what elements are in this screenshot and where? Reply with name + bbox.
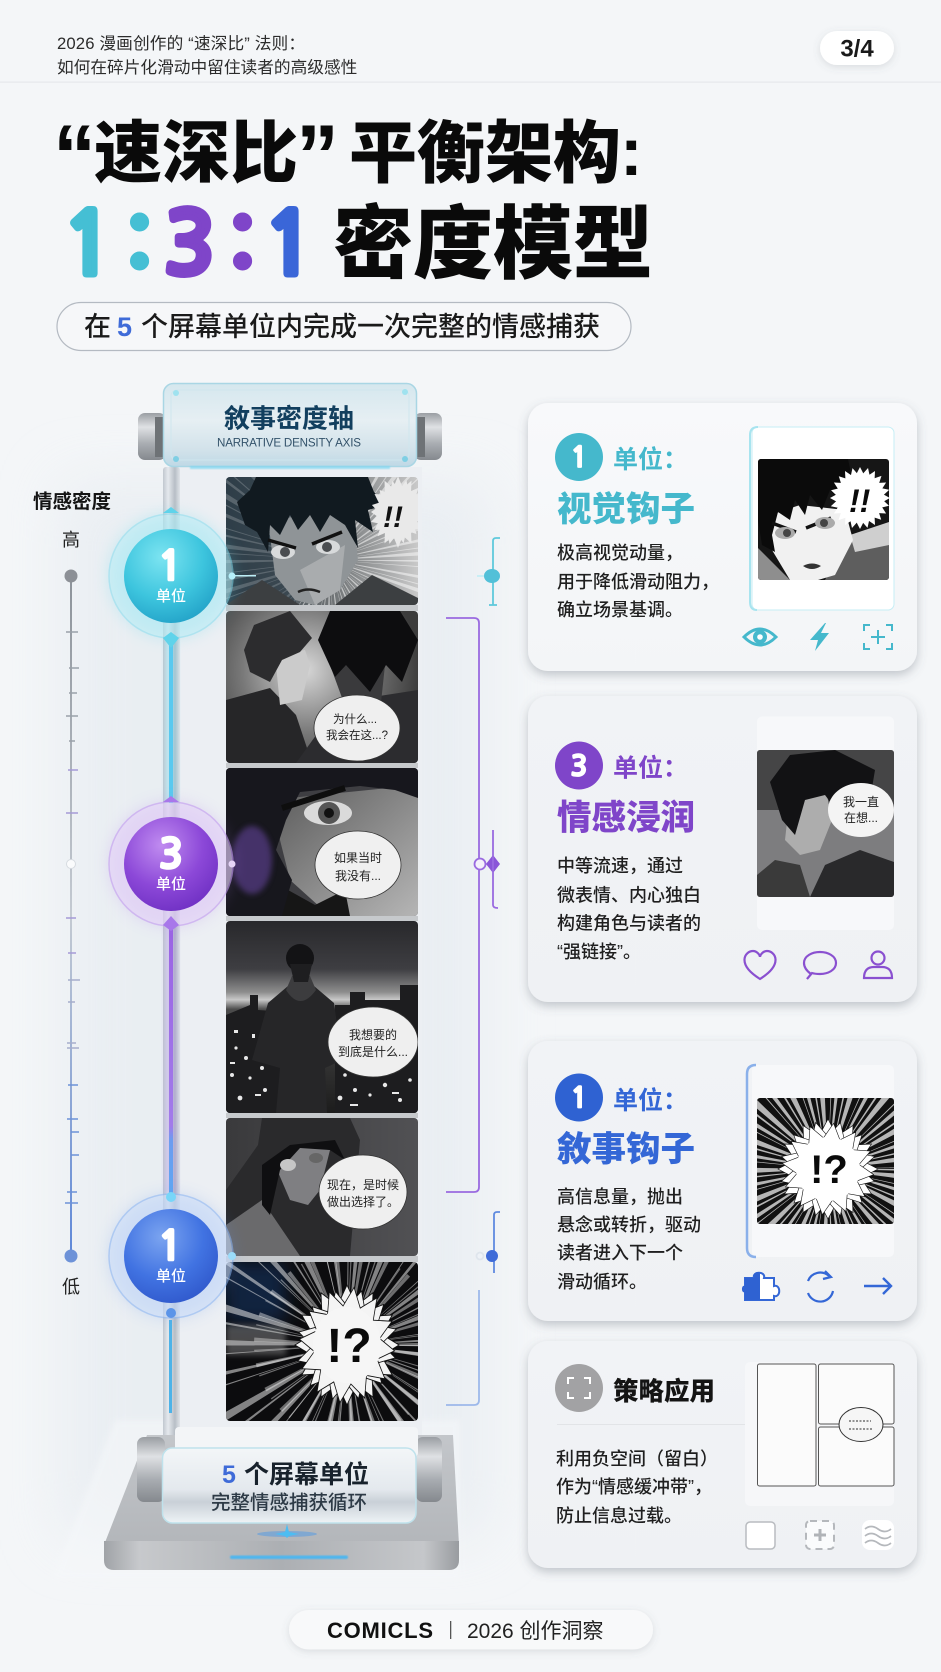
description: “强链接”。 <box>557 942 641 962</box>
card 4: strategy: 策略应用 <box>613 1377 715 1406</box>
speech bubble: 做出选择了。 <box>327 1194 399 1209</box>
top roller and title plate: 敘事密度轴 <box>224 404 354 434</box>
description: 用于降低滑动阻力， <box>557 572 719 592</box>
unit node 1 <box>109 507 256 648</box>
title line 2: ratio and model: : <box>229 202 255 287</box>
icon: lightning bolt <box>810 623 829 651</box>
comic panel 4: figure over city <box>226 921 418 1113</box>
title line 1 <box>53 108 643 204</box>
subtitle pill <box>57 302 631 350</box>
speech bubble <box>328 1007 418 1077</box>
title line 2: ratio and model: 1 <box>263 202 315 287</box>
page number badge <box>820 31 894 65</box>
description: 构建角色与读者的 <box>557 914 701 934</box>
image frame <box>750 427 894 610</box>
description: 防止信息过载。 <box>556 1506 682 1526</box>
subtitle pill: 在 <box>84 312 111 342</box>
comic panel 6: impact burst <box>226 1262 418 1421</box>
comic panel 3: close-up eye <box>226 768 418 916</box>
title line 2: ratio and model: 3 <box>163 202 216 287</box>
comic panel 6: impact burst: !? <box>326 1320 372 1373</box>
speech bubble: 我没有... <box>335 868 381 883</box>
card 2: emotional immersion: 情感浸润 <box>557 800 695 838</box>
speech bubble: 到底是什么... <box>338 1044 408 1059</box>
card 2: emotional immersion: 单位： <box>613 754 688 782</box>
icon: eye <box>744 629 776 645</box>
footer pill <box>289 1610 653 1650</box>
image frame <box>747 1065 894 1257</box>
title line 2: ratio and model: : <box>126 202 152 287</box>
base with roller <box>104 1427 459 1570</box>
description: 滑动循环。 <box>557 1272 647 1292</box>
description: 微表情、内心独白 <box>557 886 701 906</box>
title line 1: : <box>620 114 643 190</box>
icon: waves <box>862 1520 894 1550</box>
icon: right arrow <box>864 1278 891 1294</box>
title line 1: “ <box>53 108 96 204</box>
speech bubble: 我一直 <box>843 795 879 809</box>
comic panel 2: two characters facing <box>226 611 418 763</box>
speech bubble <box>319 1155 407 1229</box>
connector: purple bracket <box>446 618 500 1192</box>
connector: cyan bracket <box>477 538 500 605</box>
icon: cycle arrows <box>808 1271 833 1302</box>
badge <box>555 1074 603 1122</box>
comic: angry face: !! <box>849 483 871 519</box>
glass caption plate: 个屏幕单位 <box>244 1460 369 1489</box>
footer pill: 2026 创作洞察 <box>467 1620 604 1643</box>
layout sketch with white space <box>745 1362 894 1506</box>
card 2: emotional immersion <box>528 696 917 1002</box>
card 3: narrative hook <box>528 1041 918 1321</box>
unit node 1 blue: 单位 <box>156 1267 186 1285</box>
description <box>557 1187 701 1292</box>
metal rollers <box>138 413 442 460</box>
glass caption plate: 完整情感捕获循环 <box>211 1492 367 1514</box>
icon: focus frame with plus <box>864 625 892 649</box>
unit node 3: 单位 <box>156 875 186 893</box>
unit node 3 <box>109 796 236 931</box>
emotional density scale: 低 <box>62 1277 80 1297</box>
speech bubble <box>315 831 401 899</box>
description: 中等流速，通过 <box>557 856 683 876</box>
card 1: visual hook: 视觉钩子 <box>557 491 695 529</box>
description: 悬念或转折，驱动 <box>557 1214 701 1235</box>
glowing timeline <box>165 637 177 1413</box>
title line 1: ” <box>296 108 339 204</box>
icon: heart <box>744 951 776 979</box>
description <box>557 856 701 962</box>
top roller and title plate <box>138 384 442 469</box>
icon: dashed focus <box>806 1521 834 1549</box>
card 1: visual hook: 单位： <box>613 445 688 474</box>
description <box>557 543 719 620</box>
comic: angry face <box>758 459 897 580</box>
speech bubble: 我会在这...? <box>326 728 388 742</box>
comic: burst <box>757 1098 894 1224</box>
glass plate <box>164 384 416 469</box>
unit node 1 blue: 1 <box>158 1226 182 1266</box>
comic panel 5: hooded character <box>226 1118 418 1256</box>
connector: blue bracket <box>446 1212 500 1405</box>
unit node 1 blue <box>109 1192 236 1318</box>
badge: 3 <box>571 752 587 780</box>
emotional density scale: 情感密度 <box>33 490 111 513</box>
unit node 1: 1 <box>158 546 182 586</box>
emotional density scale: 高 <box>62 530 80 550</box>
title line 2: ratio and model: 密度模型 <box>333 200 653 289</box>
description: 利用负空间（留白） <box>556 1449 718 1469</box>
page number badge: 3/4 <box>840 36 874 62</box>
description: 作为“情感缓冲带”， <box>556 1477 712 1497</box>
badge <box>555 433 603 481</box>
title line 2: ratio and model <box>62 200 653 289</box>
unit node 3: 3 <box>159 834 183 874</box>
header: series title: 2026 漫画创作的 “速深比” 法则： <box>57 34 305 53</box>
card 4: strategy <box>528 1341 917 1568</box>
comic panel 1: shocked face: !! <box>383 501 403 534</box>
emotional density scale <box>33 490 111 1297</box>
icon: chat bubble <box>804 952 836 979</box>
card 3: narrative hook: 敘事钩子 <box>557 1131 695 1169</box>
description: 确立场景基调。 <box>557 600 683 620</box>
title line 1: 速深比 <box>94 116 298 192</box>
badge: 1 <box>571 444 587 472</box>
scroll strip and rail <box>163 467 422 1442</box>
speech bubble: 如果当时 <box>334 850 382 865</box>
description <box>556 1449 718 1526</box>
icon: blank panel <box>746 1522 775 1549</box>
title line 1: 平衡架构 <box>349 116 621 192</box>
speech bubble: 我想要的 <box>349 1027 397 1042</box>
unit node 1: 单位 <box>156 587 186 605</box>
image frame <box>757 716 894 930</box>
icon: person <box>864 952 892 978</box>
card 1: visual hook <box>528 403 917 671</box>
comic: profile with thought bubble <box>757 750 894 897</box>
header: series title <box>57 34 357 77</box>
speech bubble: 在想... <box>844 810 878 825</box>
description: 极高视觉动量， <box>557 543 683 563</box>
subtitle pill: 个屏幕单位内完成一次完整的情感捕获 <box>141 312 600 342</box>
glass caption plate: 5 <box>222 1461 236 1489</box>
comic: burst: !? <box>810 1148 848 1192</box>
description: 高信息量，抛出 <box>557 1187 683 1207</box>
header: series title: 如何在碎片化滑动中留住读者的高级感性 <box>57 58 357 77</box>
footer pill: COMICLS <box>327 1618 433 1643</box>
subtitle pill: 5 <box>117 312 132 342</box>
card 3: narrative hook: 单位： <box>613 1086 688 1115</box>
speech bubble <box>314 695 400 761</box>
comic panel 1: shocked face <box>226 477 418 605</box>
top roller and title plate: NARRATIVE DENSITY AXIS <box>217 436 361 450</box>
speech bubble <box>828 783 894 837</box>
icon: puzzle piece <box>742 1272 779 1300</box>
title line 2: ratio and model: 1 <box>62 202 114 287</box>
description: 读者进入下一个 <box>557 1243 683 1263</box>
badge: dashed frame <box>555 1364 603 1412</box>
speech bubble: 为什么... <box>333 713 377 726</box>
badge: 1 <box>571 1084 587 1112</box>
speech bubble: 现在，是时候 <box>327 1178 399 1192</box>
badge <box>555 742 603 790</box>
glass caption plate <box>162 1448 416 1523</box>
